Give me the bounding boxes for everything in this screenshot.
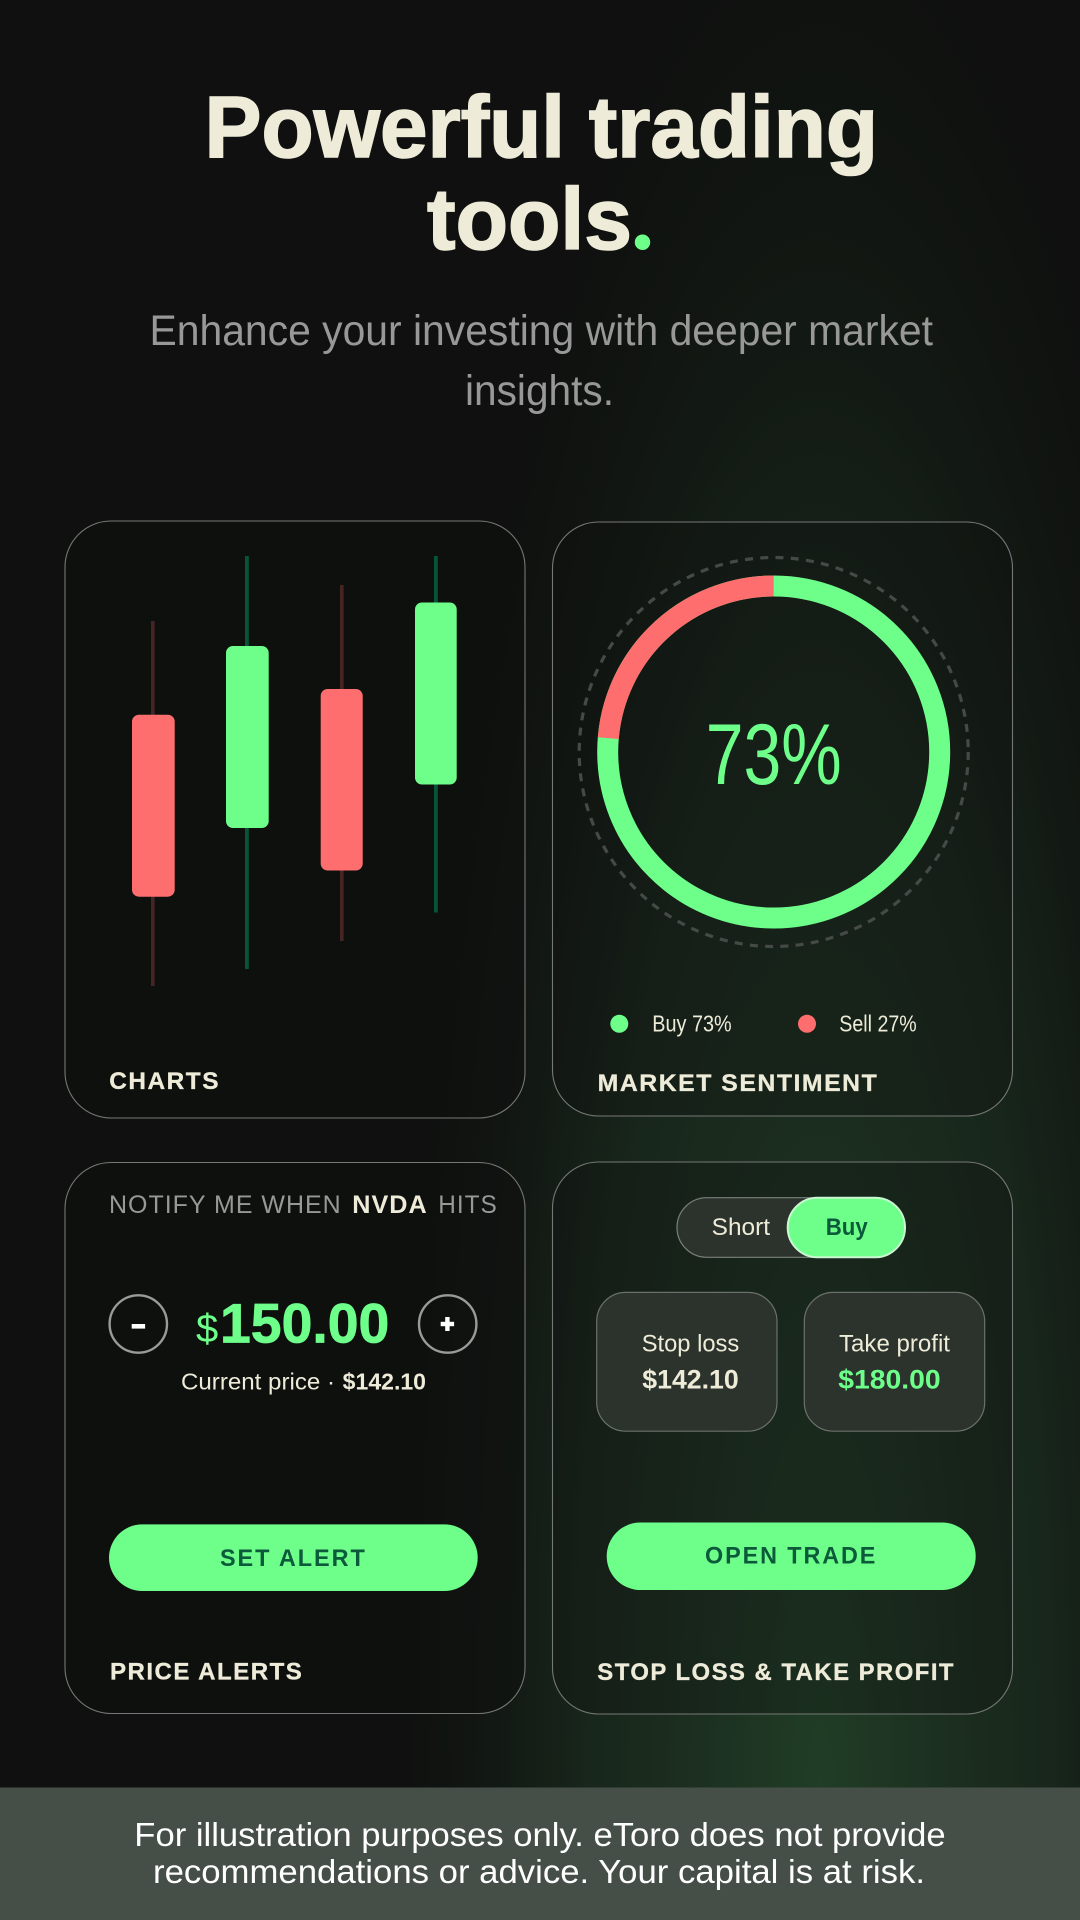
panel: stop loss and take profit xyxy=(552,1162,1012,1714)
panel: price alerts xyxy=(65,1162,525,1714)
candlestick chart xyxy=(132,556,457,986)
legend: Buy 73% xyxy=(652,1011,732,1037)
alert heading: NVDA xyxy=(352,1191,428,1219)
current price xyxy=(181,1369,426,1395)
subtitle: insights. xyxy=(465,367,614,415)
toggle: Buy xyxy=(826,1214,868,1241)
box: stop loss xyxy=(597,1292,777,1431)
toggle xyxy=(677,1198,905,1257)
subtitle xyxy=(150,307,933,415)
panel: market sentiment xyxy=(552,522,1012,1116)
box: take profit: $180.00 xyxy=(838,1365,941,1395)
button: open trade xyxy=(607,1522,976,1590)
label: price alerts: PRICE ALERTS xyxy=(110,1658,303,1685)
button: set alert: SET ALERT xyxy=(220,1545,367,1572)
footer disclaimer: For illustration purposes only. eToro does not provide xyxy=(134,1816,946,1853)
title xyxy=(204,79,878,270)
footer disclaimer xyxy=(0,1788,1080,1920)
icon: minus button xyxy=(110,1295,167,1353)
footer disclaimer: recommendations or advice. Your capital is at risk. xyxy=(153,1853,925,1890)
box: take profit: Take profit xyxy=(839,1331,950,1358)
current price: $142.10 xyxy=(343,1369,426,1395)
legend xyxy=(610,1011,917,1037)
title: tools xyxy=(427,171,632,268)
icon: plus button xyxy=(419,1295,476,1353)
button: set alert xyxy=(109,1524,478,1591)
button: open trade: OPEN TRADE xyxy=(705,1543,877,1570)
legend: Sell 27% xyxy=(839,1011,917,1037)
alert heading xyxy=(109,1191,498,1219)
box: stop loss: $142.10 xyxy=(642,1365,739,1395)
box: stop loss: Stop loss xyxy=(642,1331,739,1358)
alert heading: NOTIFY ME WHEN xyxy=(109,1191,342,1219)
title: Powerful trading xyxy=(204,79,878,176)
label: stop loss and take profit: STOP LOSS & TAKE PROFIT xyxy=(597,1659,955,1686)
title: . xyxy=(631,164,654,270)
label: charts: CHARTS xyxy=(109,1068,220,1095)
subtitle: Enhance your investing with deeper market xyxy=(150,307,933,355)
price value: 150.00 xyxy=(220,1291,389,1354)
label: market sentiment: MARKET SENTIMENT xyxy=(598,1070,878,1097)
current price: Current price · xyxy=(181,1369,335,1395)
alert heading: HITS xyxy=(438,1191,498,1219)
box: take profit xyxy=(804,1292,985,1431)
price value: $ xyxy=(196,1307,218,1351)
panel: charts xyxy=(65,521,525,1118)
toggle: Short xyxy=(712,1214,770,1241)
donut value: 73% xyxy=(706,707,842,803)
donut chart xyxy=(579,558,968,946)
